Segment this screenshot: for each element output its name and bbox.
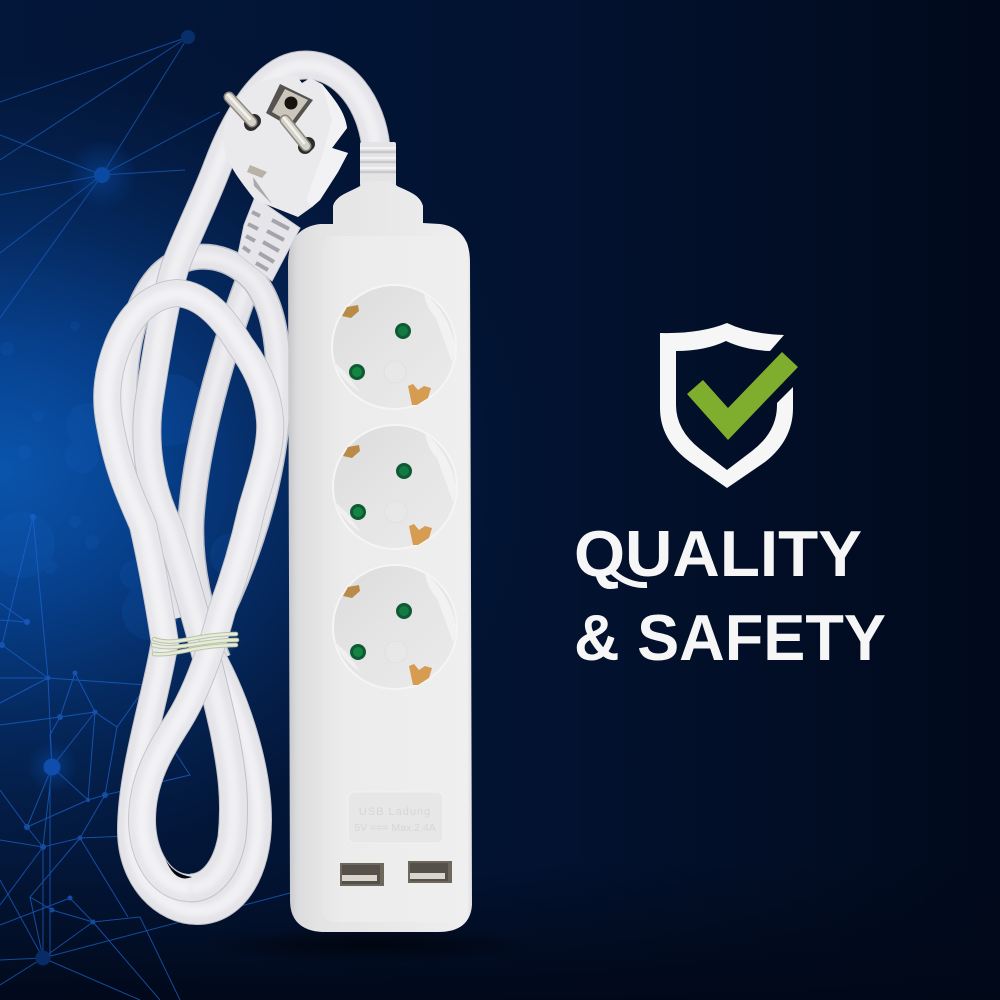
cord: outer lower loop bbox=[131, 640, 258, 911]
icon: shield with check mark bbox=[660, 323, 798, 488]
network pattern: lower left bbox=[0, 514, 290, 1000]
USB label: 5V === Max.2.4A bbox=[354, 822, 436, 834]
title bbox=[574, 517, 886, 674]
plug: right pin bbox=[284, 118, 308, 147]
plug: left pin bbox=[228, 95, 254, 124]
socket 1 bbox=[331, 284, 457, 410]
strip: cable strain relief bbox=[360, 142, 396, 186]
title line 1: QUALITY bbox=[574, 517, 862, 590]
USB label: USB Ladung bbox=[359, 806, 431, 818]
power cord bbox=[107, 65, 376, 911]
strip: housing bbox=[288, 181, 472, 932]
cord tie bbox=[153, 634, 237, 654]
title line 2: & SAFETY bbox=[574, 601, 886, 674]
USB port 1 bbox=[340, 863, 384, 886]
socket 2 bbox=[332, 424, 458, 550]
cord: strand from plug bbox=[147, 65, 376, 888]
plug: body face bbox=[223, 75, 348, 217]
network pattern: upper left bbox=[0, 30, 220, 318]
power strip bbox=[288, 142, 472, 932]
plug: earth contact recess bbox=[266, 84, 313, 128]
plug: strain relief grip bbox=[238, 197, 300, 281]
cord: middle strand bbox=[191, 262, 256, 660]
shield outline bbox=[660, 323, 793, 488]
plug bbox=[223, 75, 348, 281]
green check mark bbox=[687, 352, 798, 440]
socket 3 bbox=[332, 564, 458, 690]
cord: front ring bbox=[107, 293, 270, 888]
bokeh lights bbox=[0, 321, 254, 658]
floor shadow bbox=[200, 927, 540, 963]
USB label bbox=[348, 792, 443, 843]
cord: back ring and right strand bbox=[124, 257, 278, 645]
plug: earth clip bbox=[247, 165, 272, 204]
strip: front face bbox=[322, 236, 468, 922]
cord: shadow under lower loop bbox=[165, 858, 192, 878]
USB port 2 bbox=[408, 861, 452, 883]
